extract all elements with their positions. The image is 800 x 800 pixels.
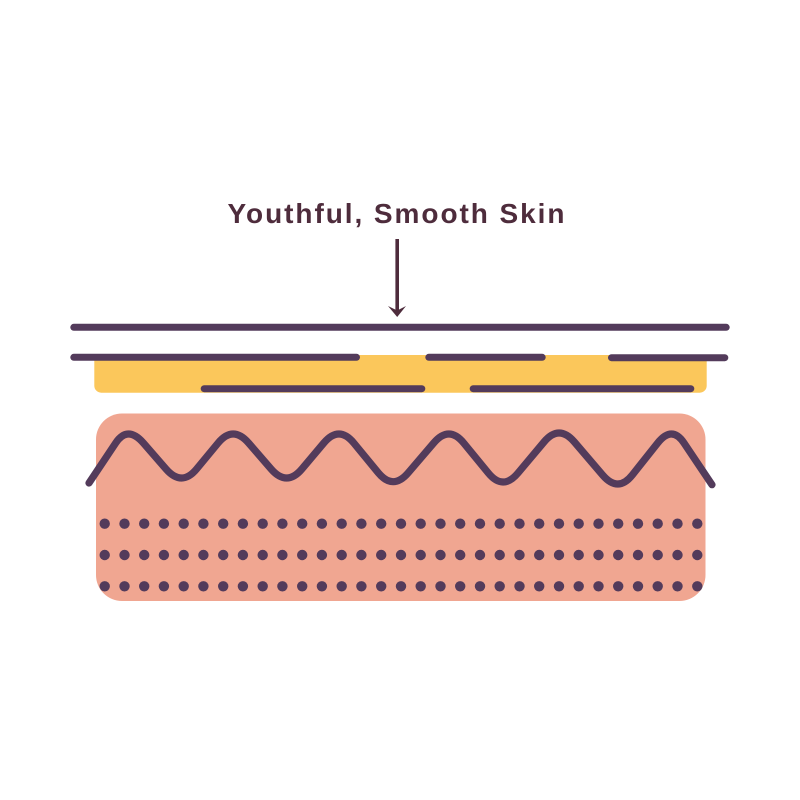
surface lines: epidermis	[74, 327, 726, 389]
panel: pink dermis layer	[96, 414, 706, 601]
dots: three rows of cells	[100, 518, 702, 592]
wavy line: firm collagen ridge	[89, 433, 712, 485]
title: Youthful, Smooth Skin	[228, 198, 564, 229]
arrow: pointing down to skin surface	[388, 239, 406, 317]
panel: yellow skin layer	[94, 355, 707, 393]
